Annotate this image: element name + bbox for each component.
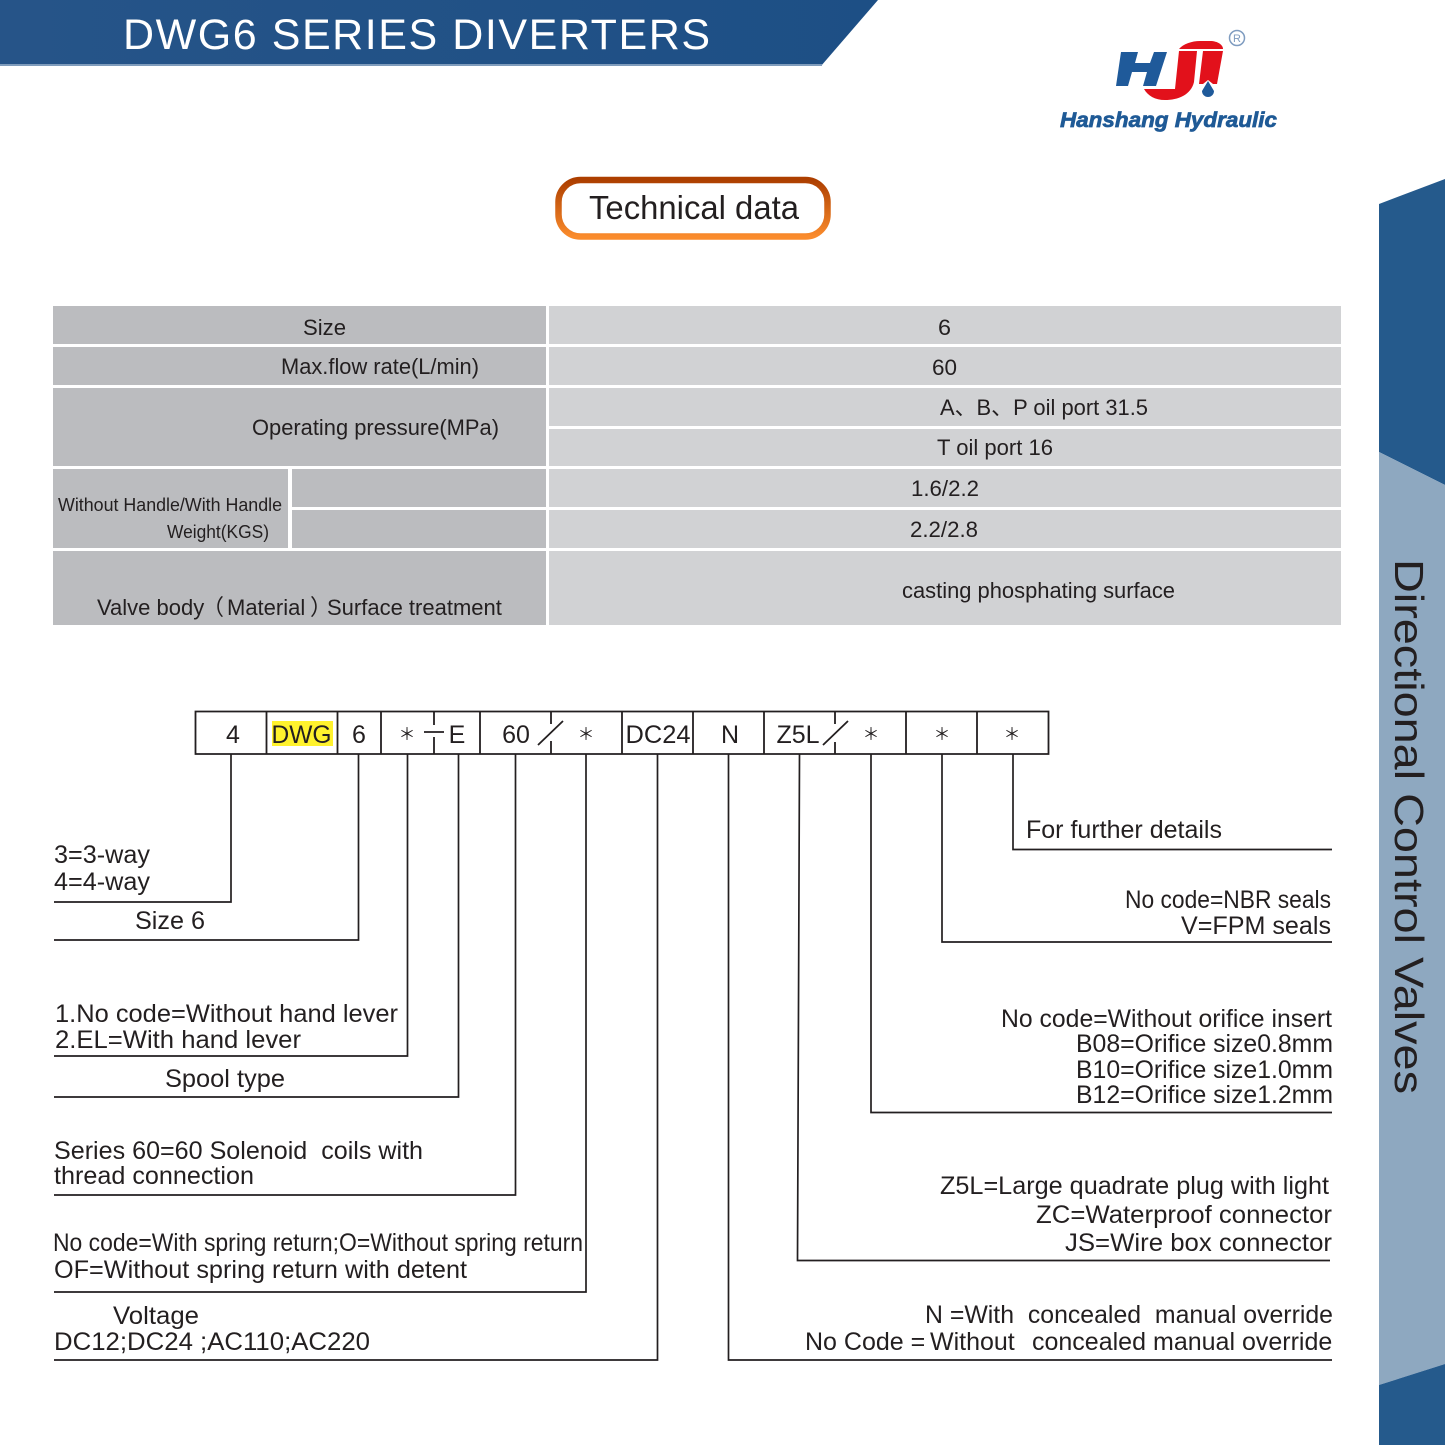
way count bbox=[54, 841, 150, 896]
orifice: B12=Orifice size1.2mm bbox=[1076, 1081, 1333, 1109]
manual override bbox=[805, 1301, 1333, 1356]
side band bbox=[1379, 179, 1445, 1445]
code labels: ＊ bbox=[862, 725, 880, 744]
voltage bbox=[54, 1302, 370, 1356]
connector bbox=[940, 1172, 1332, 1257]
row: size bbox=[303, 315, 951, 340]
row: weight: Weight(KGS) bbox=[167, 522, 269, 542]
row: valve body: Material bbox=[227, 595, 305, 620]
heading pill: Technical data bbox=[558, 180, 828, 236]
row: size: 6 bbox=[938, 315, 951, 340]
logo: Hanshang Hydraulic bbox=[1060, 30, 1277, 132]
seals bbox=[1125, 886, 1331, 940]
registered mark: R bbox=[1233, 33, 1241, 45]
right value cells bbox=[549, 306, 1341, 625]
code labels: ＊ bbox=[934, 725, 950, 744]
orifice: B08=Orifice size0.8mm bbox=[1076, 1030, 1333, 1058]
connector: ZC=Waterproof connector bbox=[1036, 1201, 1332, 1229]
row: size: Size bbox=[303, 315, 346, 340]
title banner bbox=[0, 0, 878, 66]
manual override: concealed bbox=[1032, 1328, 1146, 1356]
row: valve body: ） bbox=[310, 595, 332, 620]
way count: 3=3-way bbox=[54, 841, 150, 869]
row: max flow rate: Max.flow rate(L/min) bbox=[281, 354, 479, 379]
size: Size 6 bbox=[135, 907, 205, 935]
code labels: ＊ bbox=[1004, 725, 1020, 744]
spring return: No code=With spring return;O=Without spring return bbox=[53, 1229, 583, 1257]
row: valve body: Valve body bbox=[97, 595, 204, 620]
code labels: DC24 bbox=[626, 721, 691, 749]
logo U and arch bbox=[1144, 41, 1223, 100]
hand lever bbox=[55, 1000, 398, 1054]
seals: V=FPM seals bbox=[1181, 912, 1331, 940]
row: operating pressure: Operating pressure(MPa) bbox=[252, 415, 499, 440]
leader lines bbox=[54, 754, 1332, 1360]
highlight: DWG bbox=[272, 721, 333, 746]
code labels: ＊ bbox=[578, 725, 594, 744]
orifice: B10=Orifice size1.0mm bbox=[1076, 1056, 1333, 1084]
left annotations bbox=[53, 841, 583, 1356]
code labels: ＊ bbox=[398, 725, 416, 744]
orifice: No code=Without orifice insert bbox=[1001, 1005, 1332, 1033]
seals: No code=NBR seals bbox=[1125, 886, 1331, 914]
row: valve body: （ bbox=[202, 595, 224, 620]
row: weight bbox=[58, 476, 979, 542]
connector: JS=Wire box connector bbox=[1065, 1229, 1332, 1257]
voltage: DC12;DC24 ;AC110;AC220 bbox=[54, 1328, 370, 1356]
code labels: Z5L bbox=[776, 721, 820, 749]
code labels: 60 bbox=[502, 721, 530, 749]
series bbox=[54, 1137, 423, 1190]
spring return: OF=Without spring return with detent bbox=[54, 1256, 467, 1284]
voltage: Voltage bbox=[113, 1302, 199, 1330]
code box outline and separators bbox=[196, 712, 1048, 754]
right annotations bbox=[805, 816, 1333, 1356]
registered mark bbox=[1230, 30, 1244, 46]
row: operating pressure: A、B、P oil port 31.5 bbox=[940, 395, 1148, 420]
logo H bbox=[1116, 52, 1167, 86]
code labels: N bbox=[721, 721, 739, 749]
row: weight: 1.6/2.2 bbox=[911, 476, 979, 501]
code labels: 6 bbox=[352, 721, 366, 749]
brand name: Hanshang Hydraulic bbox=[1060, 109, 1277, 132]
row: operating pressure bbox=[252, 395, 1148, 460]
manual override: No Code = bbox=[805, 1328, 925, 1356]
spring return bbox=[53, 1229, 583, 1284]
orifice bbox=[1001, 1005, 1333, 1109]
further details: For further details bbox=[1026, 816, 1222, 844]
side label: Directional Control Valves bbox=[1386, 559, 1432, 1094]
way count: 4=4-way bbox=[54, 868, 150, 896]
manual override: N =With concealed manual override bbox=[925, 1301, 1333, 1329]
manual override: manual override bbox=[1153, 1328, 1332, 1356]
row: valve body: Surface treatment bbox=[327, 595, 502, 620]
specification table bbox=[53, 306, 1341, 625]
heading pill: Technical data: Technical data bbox=[589, 189, 800, 226]
hand lever: 1.No code=Without hand lever bbox=[55, 1000, 398, 1028]
row: weight: Without Handle/With Handle bbox=[58, 495, 282, 515]
code labels: E bbox=[449, 721, 465, 749]
code labels: DWG bbox=[272, 721, 332, 749]
title: DWG6 SERIES DIVERTERS bbox=[123, 11, 710, 59]
hand lever: 2.EL=With hand lever bbox=[55, 1026, 301, 1054]
spool type: Spool type bbox=[165, 1065, 285, 1093]
left header cells bbox=[53, 306, 546, 625]
code labels: 4 bbox=[226, 721, 240, 749]
manual override: Without bbox=[930, 1328, 1015, 1356]
row: operating pressure: T oil port 16 bbox=[937, 435, 1053, 460]
model code box bbox=[196, 712, 1048, 754]
logo drop bbox=[1202, 81, 1214, 97]
code labels bbox=[226, 721, 1020, 749]
row: max flow rate bbox=[281, 354, 957, 380]
connector: Z5L=Large quadrate plug with light bbox=[940, 1172, 1329, 1200]
row: valve body bbox=[97, 578, 1175, 620]
row: valve body: casting phosphating surface bbox=[902, 578, 1175, 603]
slashes and dash bbox=[424, 721, 848, 745]
series: thread connection bbox=[54, 1162, 254, 1190]
series: Series 60=60 Solenoid coils with bbox=[54, 1137, 423, 1165]
row: weight: 2.2/2.8 bbox=[910, 517, 978, 542]
row: max flow rate: 60 bbox=[932, 355, 957, 380]
